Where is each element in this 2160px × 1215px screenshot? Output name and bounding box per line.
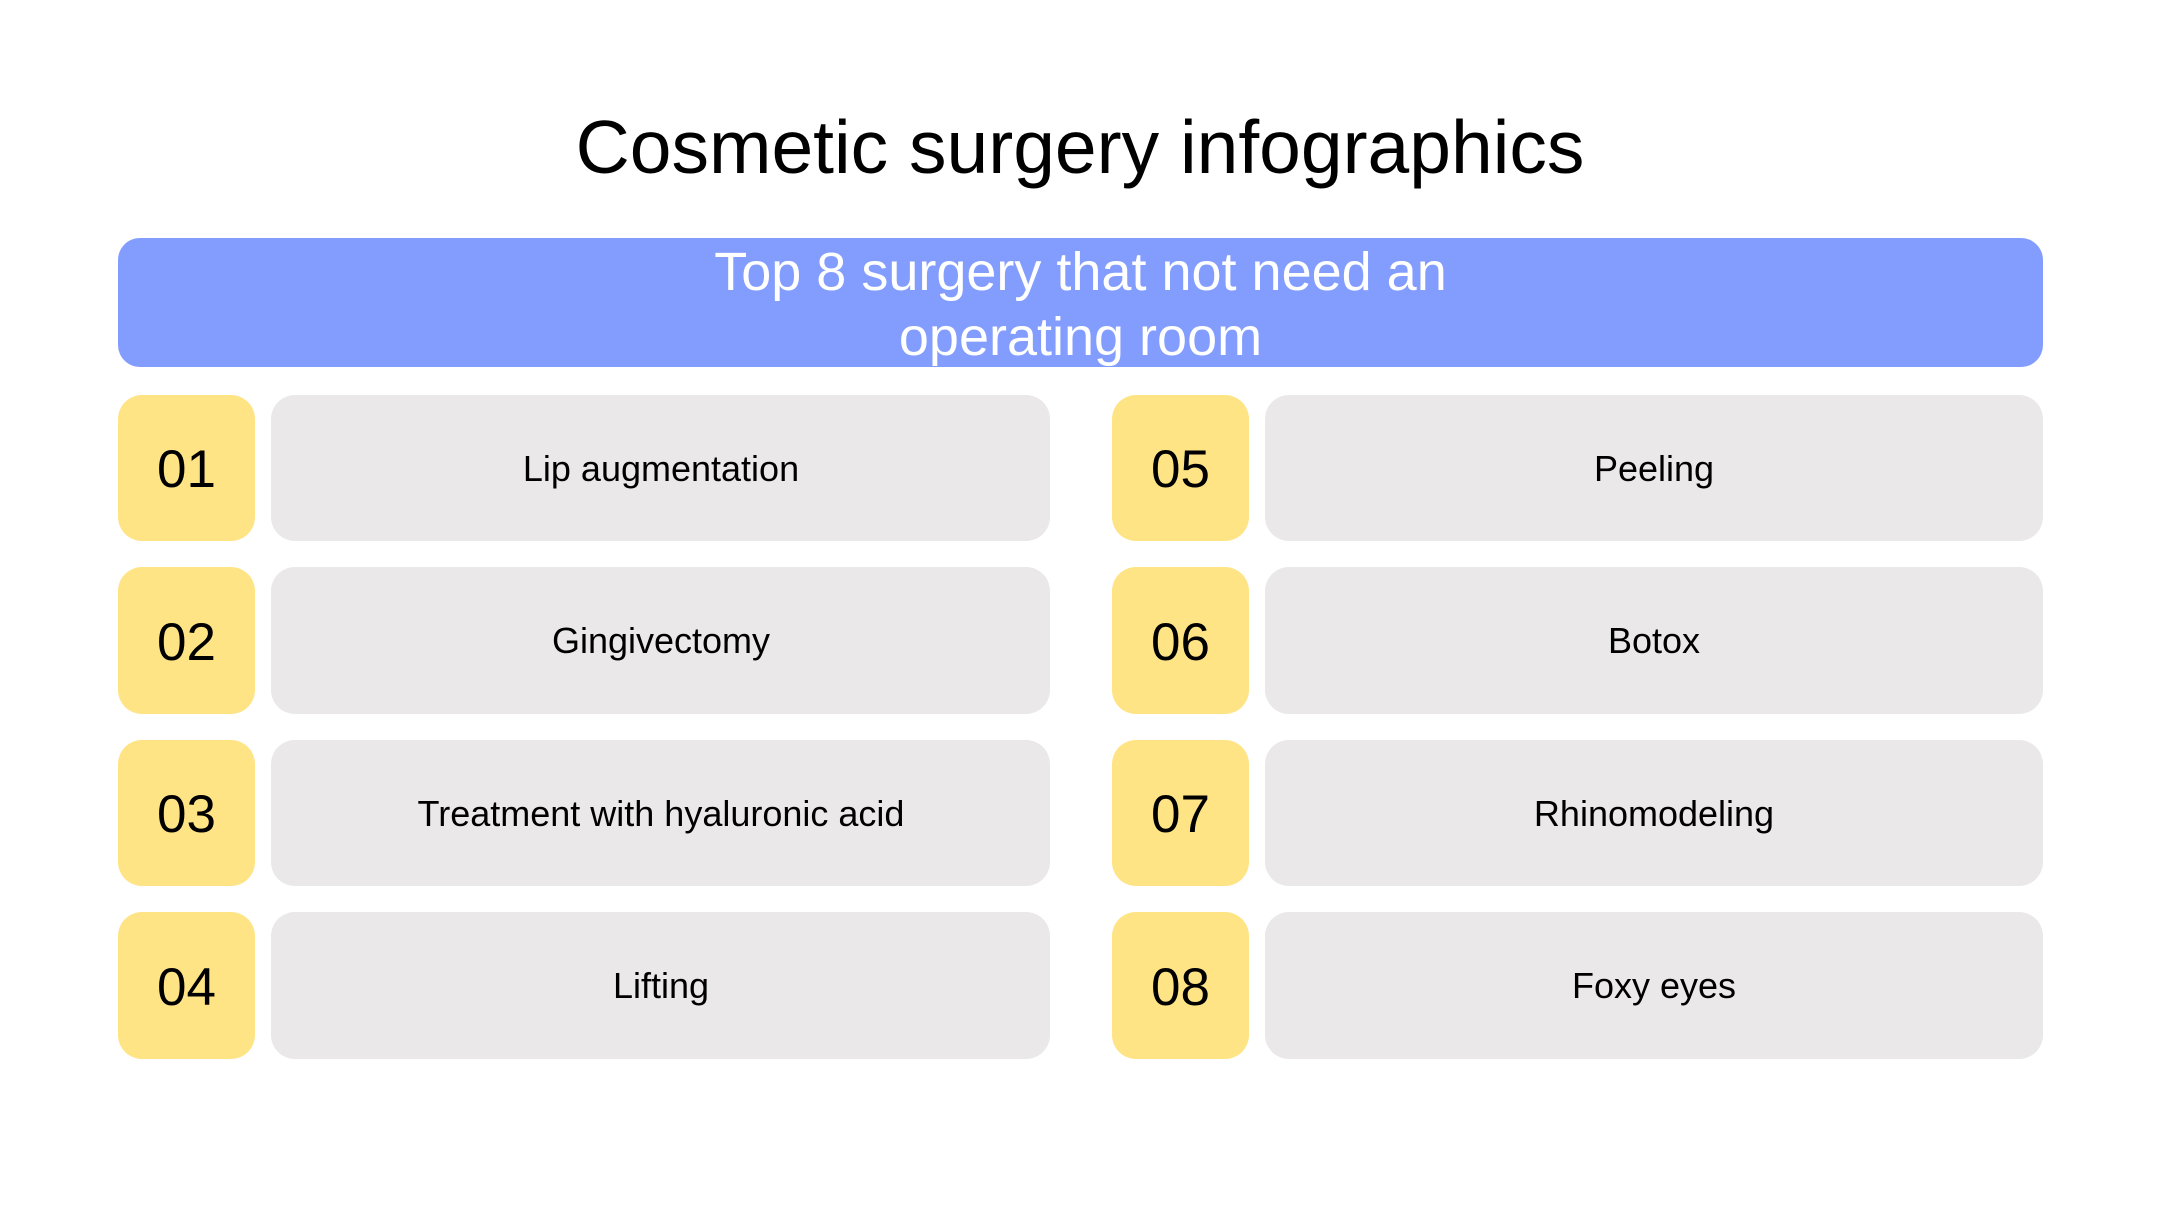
number 07: 07: [1151, 785, 1210, 844]
banner: subtitle: Top 8 surgery that not need an: [714, 242, 1447, 302]
item 05: [1112, 395, 2043, 541]
label: Lifting: [271, 912, 1050, 1058]
number 08: [1112, 912, 1249, 1058]
number 04: [118, 912, 255, 1058]
number 01: [118, 394, 255, 541]
number 07: [1112, 740, 1249, 886]
item 08: [1112, 912, 2043, 1059]
label: Gingivectomy: [271, 567, 1050, 714]
label: Foxy eyes: [1265, 912, 2043, 1058]
banner: subtitle: operating room: [899, 307, 1262, 367]
number 03: 03: [157, 785, 216, 844]
number 05: 05: [1151, 440, 1210, 499]
item 01: [118, 395, 1050, 541]
number 03: [118, 740, 255, 886]
number 02: [118, 567, 255, 714]
number 06: [1112, 567, 1249, 714]
item 02: [118, 567, 1050, 714]
number 08: 08: [1151, 958, 1210, 1017]
label: Treatment with hyaluronic acid: [271, 740, 1050, 886]
number 05: [1112, 394, 1249, 541]
item 03: [118, 740, 1050, 886]
title: Cosmetic surgery infographics: [576, 105, 1584, 189]
label: Botox: Botox: [1608, 620, 1700, 661]
number 02: 02: [157, 613, 216, 672]
label: Botox: [1265, 567, 2043, 714]
label: Peeling: Peeling: [1594, 448, 1714, 489]
item 07: [1112, 740, 2043, 886]
label: Peeling: [1265, 394, 2043, 541]
number 04: 04: [157, 958, 216, 1017]
label: Foxy eyes: Foxy eyes: [1572, 965, 1736, 1006]
banner: subtitle: [118, 238, 2043, 366]
label: Lifting: Lifting: [613, 965, 709, 1006]
label: Rhinomodeling: Rhinomodeling: [1534, 793, 1774, 834]
item 04: [118, 912, 1050, 1059]
label: Lip augmentation: Lip augmentation: [523, 448, 799, 489]
label: Lip augmentation: [271, 394, 1050, 541]
label: Gingivectomy: Gingivectomy: [552, 620, 770, 661]
number 01: 01: [157, 440, 216, 499]
label: Treatment with hyaluronic acid: Treatment with hyaluronic acid: [418, 793, 904, 834]
label: Rhinomodeling: [1265, 740, 2043, 886]
item 06: [1112, 567, 2043, 714]
number 06: 06: [1151, 613, 1210, 672]
